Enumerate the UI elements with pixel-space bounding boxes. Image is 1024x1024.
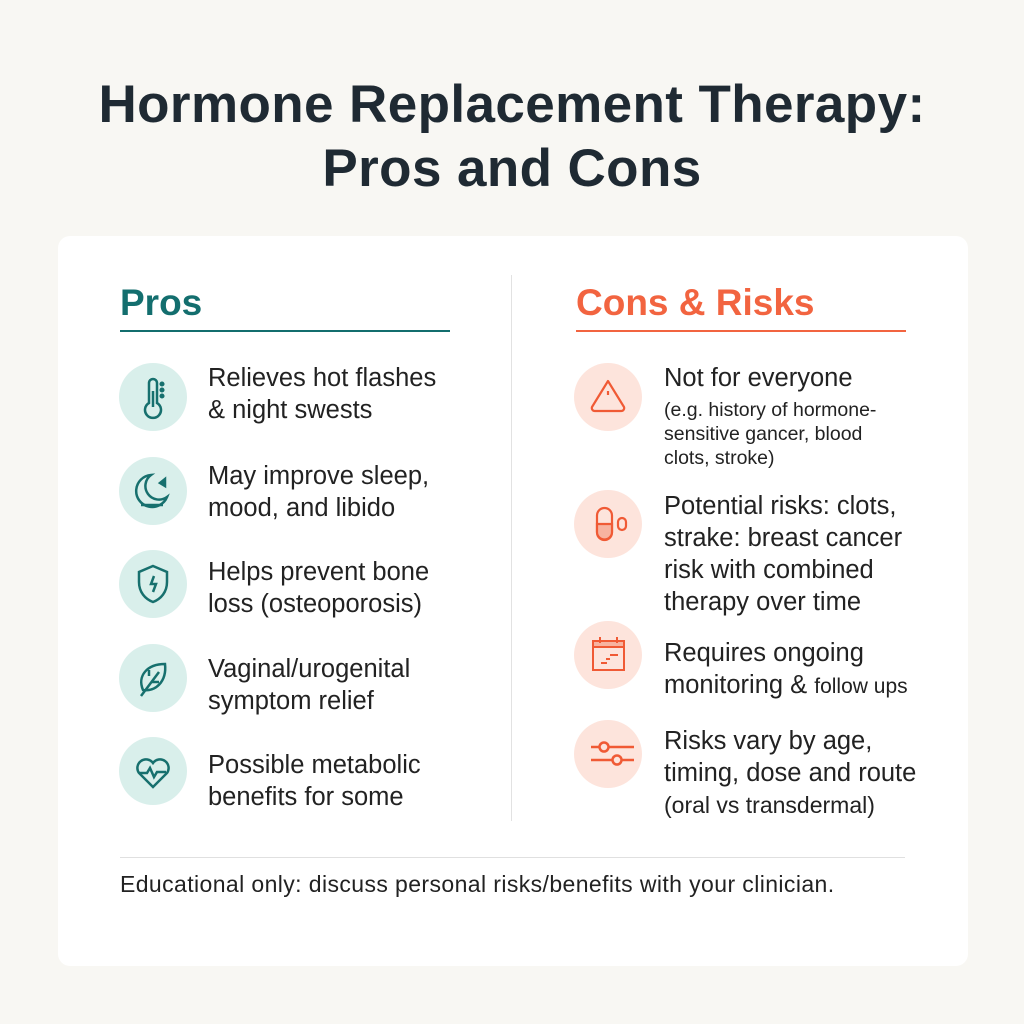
text: metabolic <box>208 751 421 811</box>
text: bone: Helps prevent bone <box>208 558 429 586</box>
text: vaginal: symptom relief <box>208 687 374 715</box>
text: sleep: mood, and libido <box>208 494 395 522</box>
text: monitoring: Requires ongoing <box>664 639 864 667</box>
text: risks vary: Risks vary by age, <box>664 727 872 755</box>
text: bone: loss (osteoporosis) <box>208 590 422 618</box>
text: potential risks <box>664 492 902 616</box>
title: Hormone Replacement Therapy: <box>98 75 926 134</box>
text: not for everyone: clots, stroke) <box>664 447 775 469</box>
icon: heart <box>119 737 187 805</box>
icon: calendar <box>574 621 642 689</box>
text: potential risks: Potential risks: clots, <box>664 492 896 520</box>
text: risks vary: (oral vs transdermal) <box>664 792 875 818</box>
text: sleep: May improve sleep, <box>208 462 429 490</box>
heading: cons: Cons & Risks <box>576 282 815 323</box>
footer note: Educational only: discuss personal risks/benefits with your clinician. <box>120 871 834 897</box>
icon: pill <box>574 490 642 558</box>
text: metabolic: Possible metabolic <box>208 751 421 779</box>
text: potential risks: risk with combined <box>664 556 874 584</box>
icon: warning <box>574 363 642 431</box>
text: not for everyone: sensitive gancer, blood <box>664 423 862 445</box>
text: risks vary <box>664 727 916 818</box>
text: vaginal <box>208 655 410 715</box>
text: vaginal: Vaginal/urogenital <box>208 655 410 683</box>
text: not for everyone: (e.g. history of hormone- <box>664 399 876 421</box>
text: monitoring: monitoring & follow ups <box>664 671 908 699</box>
text: bone <box>208 558 429 618</box>
text: risks vary: timing, dose and route <box>664 759 916 787</box>
heading: cons <box>576 280 906 332</box>
text: not for everyone <box>664 364 876 469</box>
text: hot flashes: Relieves hot flashes <box>208 364 436 392</box>
text: monitoring <box>664 639 908 699</box>
icon: thermometer <box>119 363 187 431</box>
text: hot flashes: & night swests <box>208 396 372 424</box>
title: Pros and Cons <box>322 139 702 198</box>
text: not for everyone: Not for everyone <box>664 364 853 392</box>
text: hot flashes <box>208 364 436 424</box>
card <box>58 236 968 966</box>
text: potential risks: strake: breast cancer <box>664 524 902 552</box>
text: sleep <box>208 462 429 522</box>
heading: pros <box>120 280 450 332</box>
heading: pros: Pros <box>120 282 202 323</box>
icon: moon <box>119 457 187 525</box>
divider <box>511 275 512 821</box>
text: potential risks: therapy over time <box>664 588 861 616</box>
icon: sliders <box>574 720 642 788</box>
icon: shield <box>119 550 187 618</box>
divider line <box>120 857 905 858</box>
icon: leaf <box>119 644 187 712</box>
text: metabolic: benefits for some <box>208 783 404 811</box>
title <box>98 75 926 198</box>
